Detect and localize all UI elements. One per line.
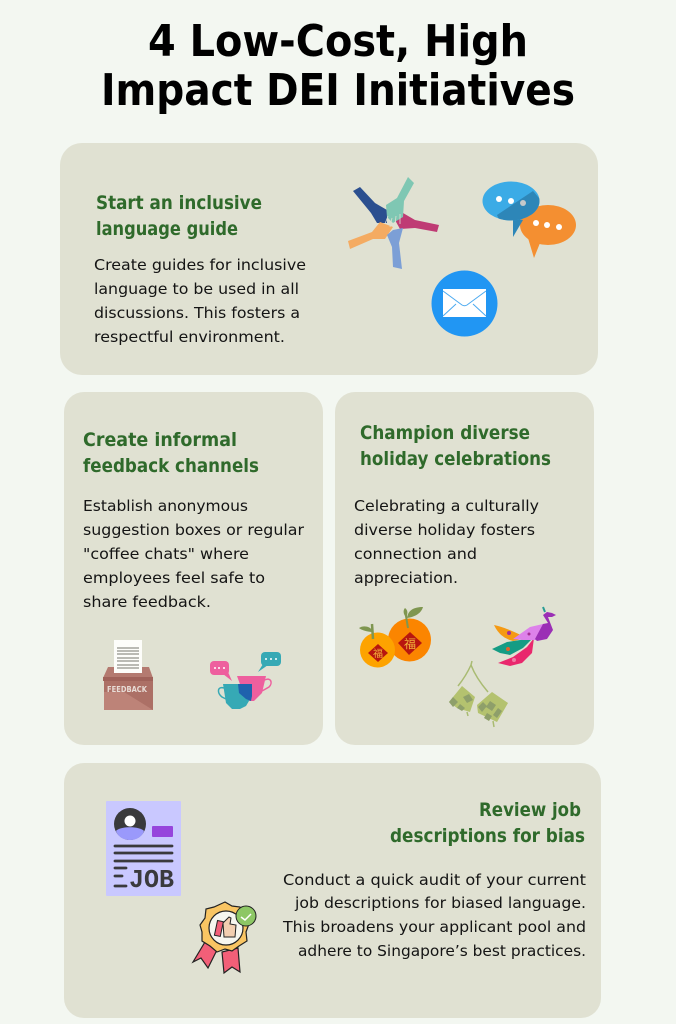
icon: speech bubbles [482,182,576,258]
icon: joined hands [348,177,439,269]
text: holiday celebrations description: Celebrating a culturally [354,497,539,515]
text: inclusive language guide description: respectful environment. [94,328,285,346]
icon: email envelope [432,270,498,336]
icon: mandarin oranges: 福 [404,635,416,652]
text: job descriptions description: job descriptions for biased language. [294,894,586,912]
icon: peacock [492,607,556,666]
heading: job descriptions review [390,799,585,847]
text: inclusive language guide description: discussions. This fosters a [94,304,300,322]
text: informal feedback description: employees feel safe to [83,569,265,587]
heading: inclusive language guide: language guide [96,218,238,240]
icon: ketupat [449,661,508,727]
heading: inclusive language guide: Start an inclusive [96,192,262,214]
text: informal feedback description: suggestion boxes or regular [83,521,305,539]
icon: feedback box: FEEDBACK [107,685,148,694]
text: inclusive language guide description [94,256,306,346]
icon: mandarin oranges [359,607,431,668]
text: informal feedback description [83,497,305,611]
panel: job descriptions review [64,763,601,1018]
heading: informal feedback channels: Create informal [83,429,237,451]
panel: diverse holiday celebrations [335,392,594,745]
icon: job document: JOB [129,865,174,895]
icon: feedback box [103,640,153,710]
text: inclusive language guide description: language to be used in all [94,280,299,298]
heading: informal feedback channels: feedback channels [83,455,259,477]
icon: job document [106,801,181,896]
heading: job descriptions review: Review job [479,799,581,821]
panel: inclusive language guide [60,143,598,375]
text: inclusive language guide description: Create guides for inclusive [94,256,306,274]
heading: diverse holiday celebrations: holiday celebrations [360,448,551,470]
text: job descriptions description: This broadens your applicant pool and [282,918,586,936]
title [101,16,575,116]
title: Impact DEI Initiatives [101,65,575,116]
panel: informal feedback channels [64,392,323,745]
heading: job descriptions review: descriptions for bias [390,825,585,847]
text: job descriptions description [282,871,586,960]
heading: informal feedback channels [83,429,259,477]
icon: coffee cups with chat bubbles [210,652,281,709]
text: holiday celebrations description: connection and [354,545,477,563]
text: informal feedback description: Establish anonymous [83,497,248,515]
text: holiday celebrations description: appreciation. [354,569,458,587]
text: holiday celebrations description [354,497,539,587]
icon: mandarin oranges: 福 [373,645,383,660]
heading: inclusive language guide [96,192,262,240]
text: job descriptions description: adhere to Singapore’s best practices. [298,942,586,960]
icon: award badge [193,902,256,973]
text: job descriptions description: Conduct a quick audit of your current [283,871,586,889]
title: 4 Low-Cost, High [148,16,528,67]
text: holiday celebrations description: diverse holiday fosters [354,521,535,539]
text: informal feedback description: share feedback. [83,593,211,611]
text: informal feedback description: "coffee chats" where [83,545,249,563]
heading: diverse holiday celebrations [360,422,551,470]
heading: diverse holiday celebrations: Champion diverse [360,422,530,444]
